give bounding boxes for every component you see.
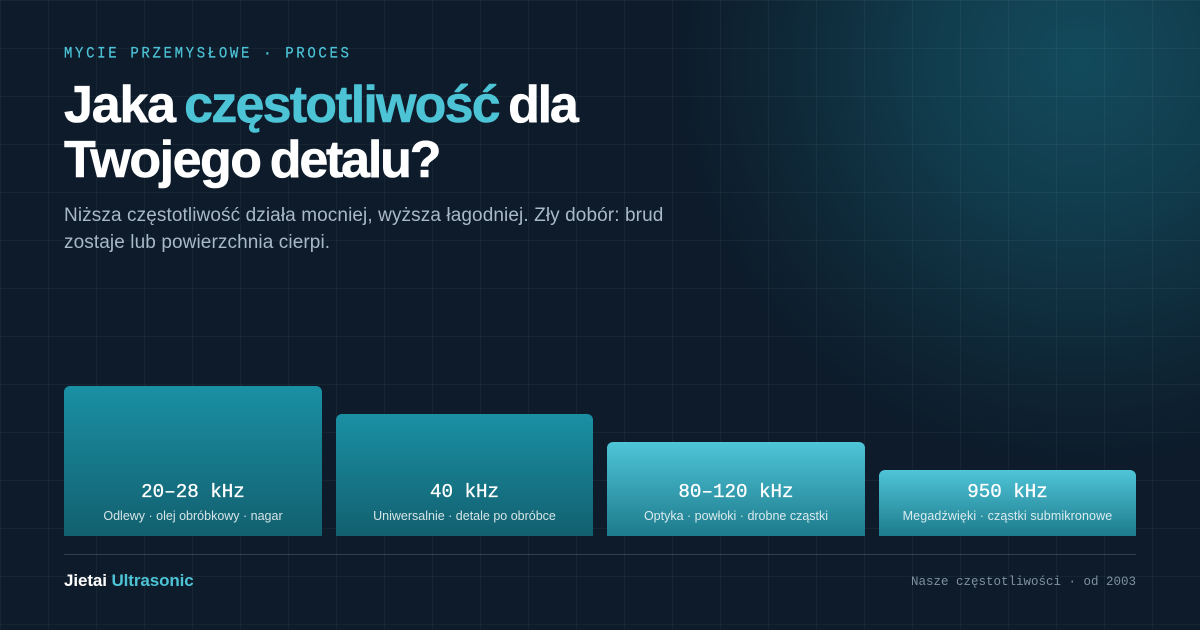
bar: 20–28 kHz [64, 386, 322, 536]
title: Jaka częstotliwość dla [64, 76, 577, 134]
eyebrow label: MYCIE PRZEMYSŁOWE · PROCES [64, 44, 352, 63]
title [64, 76, 580, 189]
title: Twojego detalu? [64, 131, 439, 189]
bar: 40 kHz: 40 kHz [430, 481, 499, 503]
bar: 80–120 kHz [607, 442, 865, 536]
bar: 40 kHz: Uniwersalnie · detale po obróbce [373, 509, 556, 523]
bar: 80–120 kHz: Optyka · powłoki · drobne cząstki [644, 509, 828, 523]
bar: 40 kHz [336, 414, 593, 536]
bar: 950 kHz: 950 kHz [967, 481, 1048, 503]
subtitle text: zostaje lub powierzchnia cierpi. [64, 232, 330, 253]
footer note: Nasze częstotliwości · od 2003 [911, 575, 1136, 589]
bar: 950 kHz: Megadźwięki · cząstki submikronowe [903, 509, 1112, 523]
bar: 20–28 kHz: Odlewy · olej obróbkowy · nagar [103, 509, 283, 523]
brand name: Jietai Ultrasonic [64, 570, 194, 590]
subtitle text: Niższa częstotliwość działa mocniej, wyższa łagodniej. Zły dobór: brud [64, 205, 663, 226]
subtitle text [64, 205, 663, 253]
bar: 20–28 kHz: 20–28 kHz [141, 481, 245, 503]
bar: 80–120 kHz: 80–120 kHz [678, 481, 794, 503]
bar: 950 kHz [879, 470, 1136, 536]
